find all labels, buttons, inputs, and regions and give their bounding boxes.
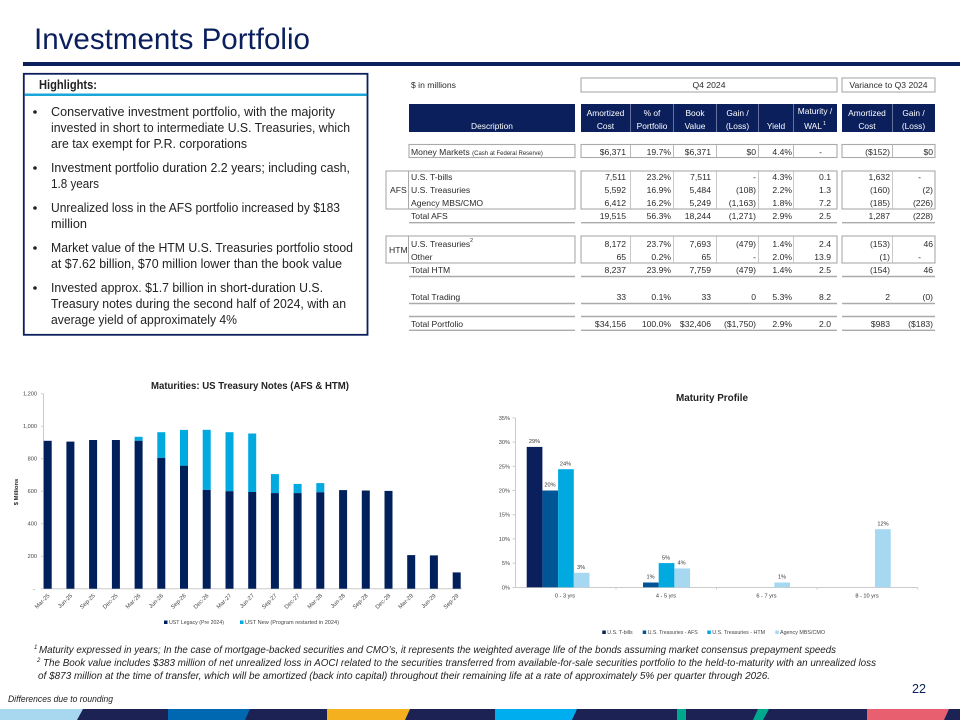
bullet 1: are tax exempt for P.R. corporations [51,136,247,151]
y axis: 800 [28,457,37,463]
chart title: Maturity Profile [676,392,748,404]
rows: HTM securities: Other [411,252,433,262]
row: money markets: 4.4% [772,147,792,157]
row: total AFS: 2.9% [772,211,792,221]
rows: AFS securities: 1.8% [772,198,792,208]
x axis date labels: Jun-25 [57,593,74,610]
row: total AFS [409,211,935,223]
rows: HTM securities: - [753,252,756,262]
row: total AFS: 19,515 [600,211,626,221]
data labels: 1% [646,574,655,580]
row: total HTM: (154) [870,265,890,275]
row: total trading: 0.1% [651,292,671,302]
data labels: 20% [544,482,556,488]
rows: HTM securities: U.S. Treasuries [411,239,470,249]
row: total portfolio [409,316,935,330]
row: total HTM: 8,237 [604,265,626,275]
x axis date labels: Sep-26 [170,593,188,611]
period header: variance [842,78,935,92]
x axis date labels: Jun-29 [421,593,438,610]
bullet 5 [33,280,346,327]
column headers: Value [685,121,706,131]
row: total HTM: 7,759 [689,265,711,275]
rows: HTM securities: 2.0% [772,252,792,262]
row: total HTM [409,265,935,276]
row: total trading: 0 [751,292,756,302]
title: Investments Portfolio [34,23,310,56]
footnotes: of $873 million at the time of transfer, which will be amortized (back into capital) throughout their remaining life at a rate of approximately 5% per quarter through 2026. [38,670,770,682]
rows: AFS securities [386,171,935,209]
bullet 1: invested in short to intermediate U.S. Treasuries, which [51,120,350,135]
column headers: Gain / [902,108,925,118]
column headers: Book [685,108,705,118]
x axis date labels: Mar-25 [34,593,51,610]
category labels [555,594,879,600]
column headers: Gain / [726,108,749,118]
category labels: 4 - 5 yrs [656,594,676,600]
units label: $ in millions [411,80,456,90]
column headers: Amortized [848,108,886,118]
bullet 4: Market value of the HTM U.S. Treasuries portfolio stood [51,240,353,255]
row: money markets: $0 [923,147,933,157]
row: total portfolio: 2.0 [819,319,831,329]
axes: 25% [499,464,510,470]
rows: AFS securities: U.S. Treasuries [411,185,470,195]
row: total trading: 33 [701,292,711,302]
rows: AFS securities: 1.3 [819,185,831,195]
rows: AFS securities: (160) [870,185,890,195]
footnotes: Maturity expressed in years; In the case of mortgage-backed securities and CMO’s, it represents the weighted average life of the bonds assuming market consensus prepayment speeds [39,644,837,656]
x axis date labels: Dec-26 [193,593,210,611]
row: total portfolio: $32,406 [680,319,711,329]
x axis date labels [34,593,460,611]
row: total portfolio: 100.0% [642,319,671,329]
rows: AFS securities: 23.2% [647,172,671,182]
row: total HTM: 23.9% [647,265,671,275]
investments table [386,78,935,330]
bars: U.S. Treasuries HTM [558,469,674,587]
bullet 3: Unrealized loss in the AFS portfolio increased by $183 [51,200,340,215]
row: total trading: (0) [922,292,933,302]
row: money markets: $6,371 [685,147,711,157]
bullet 5: Treasury notes during the second half of 2024, with an [51,296,346,311]
row: money markets: Money Markets (Cash at Federal Reserve) [411,147,543,157]
row: total AFS: 1,287 [868,211,890,221]
rows: HTM securities: 65 [701,252,711,262]
axes: 20% [499,488,510,494]
y axis: 600 [28,489,37,495]
column headers: Portfolio [637,121,668,131]
legend [602,630,826,636]
x axis date labels: Sep-25 [79,593,97,611]
column headers: Cost [597,121,615,131]
bullet 2 [33,160,350,191]
legend: U.S. Treasuries - HTM [712,630,765,636]
x axis date labels: Jun-26 [148,593,165,610]
x axis date labels: Mar-29 [398,593,415,610]
x axis date labels: Dec-25 [102,593,120,611]
row: total portfolio: ($183) [908,319,933,329]
chart: maturity profile [499,392,918,636]
row: money markets: $6,371 [600,147,626,157]
bullet 2: Investment portfolio duration 2.2 years; including cash, [51,160,350,175]
row: total trading [409,292,935,304]
row: total AFS: (1,271) [729,211,756,221]
axes: 15% [499,513,510,519]
row: total HTM: 46 [923,265,933,275]
x axis date labels: Jun-27 [239,593,256,610]
data labels: 29% [529,439,540,445]
rows: AFS securities: 5,484 [689,185,711,195]
footnotes: The Book value includes $383 million of net unrealized loss in AOCI related to the securities transferred from available-for-sale securities portfolio to the held-to-maturity with an unrealized loss [43,657,877,669]
row: total portfolio: $34,156 [595,319,626,329]
column headers: (Loss) [726,121,749,131]
period header: variance: Variance to Q3 2024 [849,80,928,90]
row: total portfolio: ($1,750) [724,319,756,329]
x axis date labels: Mar-27 [216,593,233,610]
rows: HTM securities: 46 [923,239,933,249]
row: total portfolio: $983 [871,319,890,329]
rows: AFS securities: 7,511 [690,172,711,182]
highlights heading underline [25,94,367,96]
footnotes [34,644,877,682]
bullet 4: at $7.62 billion, $70 million lower than the book value [51,256,342,271]
legend: U.S. T-bills [607,630,633,636]
rows: HTM securities: 8,172 [604,239,626,249]
axes [499,416,918,591]
footnotes: 1 [34,645,37,651]
row: total HTM: (479) [736,265,756,275]
bullet 1: Conservative investment portfolio, with the majority [51,104,335,119]
bullet 3: million [51,216,87,231]
column headers [409,104,935,132]
column headers: Maturity / [798,106,833,116]
axes: 35% [499,416,510,422]
AFS label: AFS [390,185,407,195]
column headers: Cost [858,121,876,131]
rows: HTM securities: 0.2% [651,252,671,262]
row: total portfolio: Total Portfolio [411,319,463,329]
rows: AFS securities: 1,632 [868,172,890,182]
row: total trading: 5.3% [772,292,792,302]
rows: AFS securities: Agency MBS/CMO [411,198,483,208]
row: total trading: Total Trading [411,292,460,302]
legend [164,620,339,626]
x axis date labels: Mar-28 [307,593,324,610]
rows: AFS securities: U.S. T-bills [411,172,452,182]
column headers: (Loss) [902,121,925,131]
x axis date labels: Dec-28 [375,593,392,611]
row: total HTM: 1.4% [772,265,792,275]
data labels: 24% [560,462,571,468]
rows: HTM securities: 2.4 [819,239,831,249]
axes: 30% [499,440,510,446]
row: total trading: 33 [616,292,626,302]
row: total portfolio: 2.9% [772,319,792,329]
y axis: - [33,587,35,593]
column headers: Description [471,121,513,131]
y axis: $ Millions [14,479,20,505]
bullet 5: average yield of approximately 4% [51,312,237,327]
bars: UST legacy [44,440,461,589]
rows: HTM securities: 13.9 [814,252,831,262]
rows: AFS securities: - [918,172,921,182]
rows: AFS securities: 2.2% [772,185,792,195]
footnotes: 2 [36,658,41,664]
rows: HTM securities: (479) [736,239,756,249]
page number: 22 [912,681,926,696]
period header: Q4 2024 [581,78,837,92]
title rule [23,62,960,66]
data labels: 1% [778,574,786,580]
rows: HTM securities: 23.7% [647,239,671,249]
panel: highlights [24,74,368,335]
period header: Q4 2024: Q4 2024 [693,80,726,90]
bars: Agency MBS/CMO [574,529,891,587]
row: money markets [409,144,935,158]
highlights heading: Highlights: [39,78,97,92]
rows: HTM securities: 65 [616,252,626,262]
rows: AFS securities: 0.1 [819,172,831,182]
rows: HTM securities: (153) [870,239,890,249]
rows: AFS securities: 16.2% [647,198,671,208]
rows: AFS securities: (108) [736,185,756,195]
rows: AFS securities: 16.9% [647,185,671,195]
row: money markets: - [819,147,822,157]
axes: 5% [502,561,510,567]
bullet 2: 1.8 years [51,176,99,191]
rows: AFS securities: 5,592 [604,185,626,195]
rows: HTM securities: 2 [470,238,473,244]
bullet 3 [33,200,340,231]
row: total trading: 2 [885,292,890,302]
legend: U.S. Treasuries - AFS [648,630,698,636]
legend: Agency MBS/CMO [780,630,826,636]
rows: AFS securities: 7.2 [819,198,831,208]
chart: US Treasury note maturities [14,381,462,626]
rows: HTM securities: 7,693 [689,239,711,249]
category labels: 8 - 10 yrs [855,594,879,600]
data labels: 12% [877,522,889,528]
x axis date labels: Sep-29 [443,593,460,611]
row: total trading: 8.2 [819,292,831,302]
bars: UST new [135,430,324,493]
rows: HTM securities: 1.4% [772,239,792,249]
row: total HTM: 2.5 [819,265,831,275]
x axis date labels: Dec-27 [284,593,301,611]
x axis date labels: Mar-26 [125,593,142,610]
bullet 5: Invested approx. $1.7 billion in short-duration U.S. [51,280,323,295]
rows: AFS securities: (226) [913,198,933,208]
column headers: WAL [804,121,822,131]
row: total AFS: Total AFS [411,211,448,221]
column headers: 1 [823,121,826,127]
x axis date labels: Sep-28 [352,593,370,611]
row: total AFS: 2.5 [819,211,831,221]
rows: HTM securities: (1) [879,252,890,262]
row: total AFS: 56.3% [647,211,671,221]
rows: HTM securities [386,236,935,263]
rows: AFS securities: (2) [922,185,933,195]
row: total AFS: 18,244 [685,211,711,221]
y axis [14,392,462,593]
legend: UST Legacy (Pre 2024) [169,620,224,626]
y axis: 200 [28,554,37,560]
data labels: 5% [662,556,670,562]
bullet 1 [33,104,350,151]
rows: AFS securities: - [753,172,756,182]
data labels: 3% [577,565,585,571]
rows: AFS securities: 4.3% [772,172,792,182]
rows: AFS securities: (1,163) [729,198,756,208]
y axis: 1,000 [23,424,37,430]
y axis: 400 [28,522,37,528]
chart title: Maturities: US Treasury Notes (AFS & HTM) [151,381,349,392]
x axis date labels: Jun-28 [330,593,347,610]
bars: U.S. Treasuries AFS [542,490,659,587]
rows: AFS securities: 7,511 [605,172,626,182]
column headers: % of [644,108,661,118]
bullet 4 [33,240,353,271]
data labels: 4% [677,560,686,566]
category labels: 0 - 3 yrs [555,594,575,600]
rows: AFS securities: 5,249 [689,198,711,208]
rows: AFS securities: 6,412 [604,198,626,208]
rounding note: Differences due to rounding [8,694,113,704]
column headers: Amortized [587,108,625,118]
axes: 10% [499,537,510,543]
y axis: 1,200 [23,392,37,398]
row: total AFS: (228) [913,211,933,221]
row: total HTM: Total HTM [411,265,450,275]
x axis date labels: Sep-27 [261,593,279,611]
row: money markets: $0 [746,147,756,157]
column headers: Yield [767,121,785,131]
data labels [529,439,889,580]
rows: HTM securities: - [918,252,921,262]
HTM label: HTM [389,245,408,255]
row: money markets: 19.7% [647,147,671,157]
legend: UST New (Program restarted in 2024) [245,620,339,626]
row: money markets: ($152) [865,147,890,157]
category labels: 6 - 7 yrs [756,594,777,600]
bars: U.S. T-bills [527,447,542,587]
rows: AFS securities: (185) [870,198,890,208]
footer colour band [0,709,960,720]
axes: 0% [502,585,510,591]
